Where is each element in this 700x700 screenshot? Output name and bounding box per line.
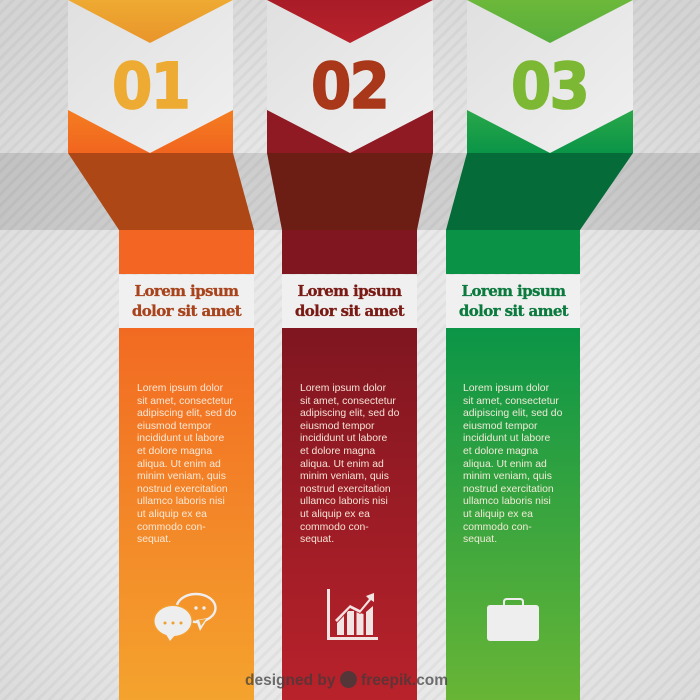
body text 3: ut aliquip ex ea bbox=[463, 509, 533, 520]
number 03: 03 bbox=[511, 50, 588, 123]
body text 3: minim veniam, quis bbox=[463, 471, 552, 482]
body text 3: sit amet, consectetur bbox=[463, 396, 559, 407]
body text 3: sequat. bbox=[463, 534, 497, 545]
heading 3: Lorem ipsum bbox=[462, 282, 565, 300]
body text 2: aliqua. Ut enim ad bbox=[300, 459, 384, 470]
number 01: 01 bbox=[112, 50, 189, 123]
body text 2: nostrud exercitation bbox=[300, 484, 391, 495]
watermark: designed by freepik.com bbox=[245, 672, 448, 689]
body text 3 bbox=[463, 383, 562, 545]
icon: chat bubbles bbox=[154, 594, 216, 641]
body text 2: ut aliquip ex ea bbox=[300, 509, 370, 520]
body text 2: minim veniam, quis bbox=[300, 471, 389, 482]
body text 1: nostrud exercitation bbox=[137, 484, 228, 495]
body text 2: eiusmod tempor bbox=[300, 421, 375, 432]
horizontal shadow band bbox=[0, 153, 700, 230]
body text 1: eiusmod tempor bbox=[137, 421, 212, 432]
body text 2: sequat. bbox=[300, 534, 334, 545]
heading 3: dolor sit amet bbox=[459, 302, 568, 320]
icon: growth chart bbox=[327, 589, 378, 640]
heading 3 bbox=[459, 282, 569, 320]
body text 3: ullamco laboris nisi bbox=[463, 496, 551, 507]
body text 2: ullamco laboris nisi bbox=[300, 496, 388, 507]
heading 1 bbox=[132, 282, 242, 320]
body text 3: nostrud exercitation bbox=[463, 484, 554, 495]
ribbon 3 bbox=[446, 0, 633, 700]
heading 2: Lorem ipsum bbox=[298, 282, 401, 300]
body text 1: sit amet, consectetur bbox=[137, 396, 233, 407]
body text 3: incididunt ut labore bbox=[463, 433, 550, 444]
body text 3: et dolore magna bbox=[463, 446, 538, 457]
body text 3: Lorem ipsum dolor bbox=[463, 383, 549, 394]
body text 3: aliqua. Ut enim ad bbox=[463, 459, 547, 470]
body text 2: incididunt ut labore bbox=[300, 433, 387, 444]
icon: briefcase bbox=[487, 599, 539, 641]
body text 2: et dolore magna bbox=[300, 446, 375, 457]
body text 1: commodo con- bbox=[137, 522, 206, 533]
body text 1: adipiscing elit, sed do bbox=[137, 408, 236, 419]
heading 1: dolor sit amet bbox=[132, 302, 241, 320]
body text 2: commodo con- bbox=[300, 522, 369, 533]
heading 2 bbox=[295, 282, 405, 320]
body text 2: sit amet, consectetur bbox=[300, 396, 396, 407]
ribbon 1 bbox=[68, 0, 254, 700]
body text 1: sequat. bbox=[137, 534, 171, 545]
body text 2: Lorem ipsum dolor bbox=[300, 383, 386, 394]
body text 1: et dolore magna bbox=[137, 446, 212, 457]
body text 1 bbox=[137, 383, 236, 545]
body text 3: eiusmod tempor bbox=[463, 421, 538, 432]
body text 2 bbox=[300, 383, 399, 545]
body text 3: adipiscing elit, sed do bbox=[463, 408, 562, 419]
heading 2: dolor sit amet bbox=[295, 302, 404, 320]
body text 1: ut aliquip ex ea bbox=[137, 509, 207, 520]
heading 1: Lorem ipsum bbox=[135, 282, 238, 300]
number 02: 02 bbox=[311, 50, 388, 123]
body text 2: adipiscing elit, sed do bbox=[300, 408, 399, 419]
body text 1: minim veniam, quis bbox=[137, 471, 226, 482]
body text 3: commodo con- bbox=[463, 522, 532, 533]
body text 1: Lorem ipsum dolor bbox=[137, 383, 223, 394]
ribbon 2 bbox=[267, 0, 433, 700]
body text 1: ullamco laboris nisi bbox=[137, 496, 225, 507]
body text 1: aliqua. Ut enim ad bbox=[137, 459, 221, 470]
body text 1: incididunt ut labore bbox=[137, 433, 224, 444]
